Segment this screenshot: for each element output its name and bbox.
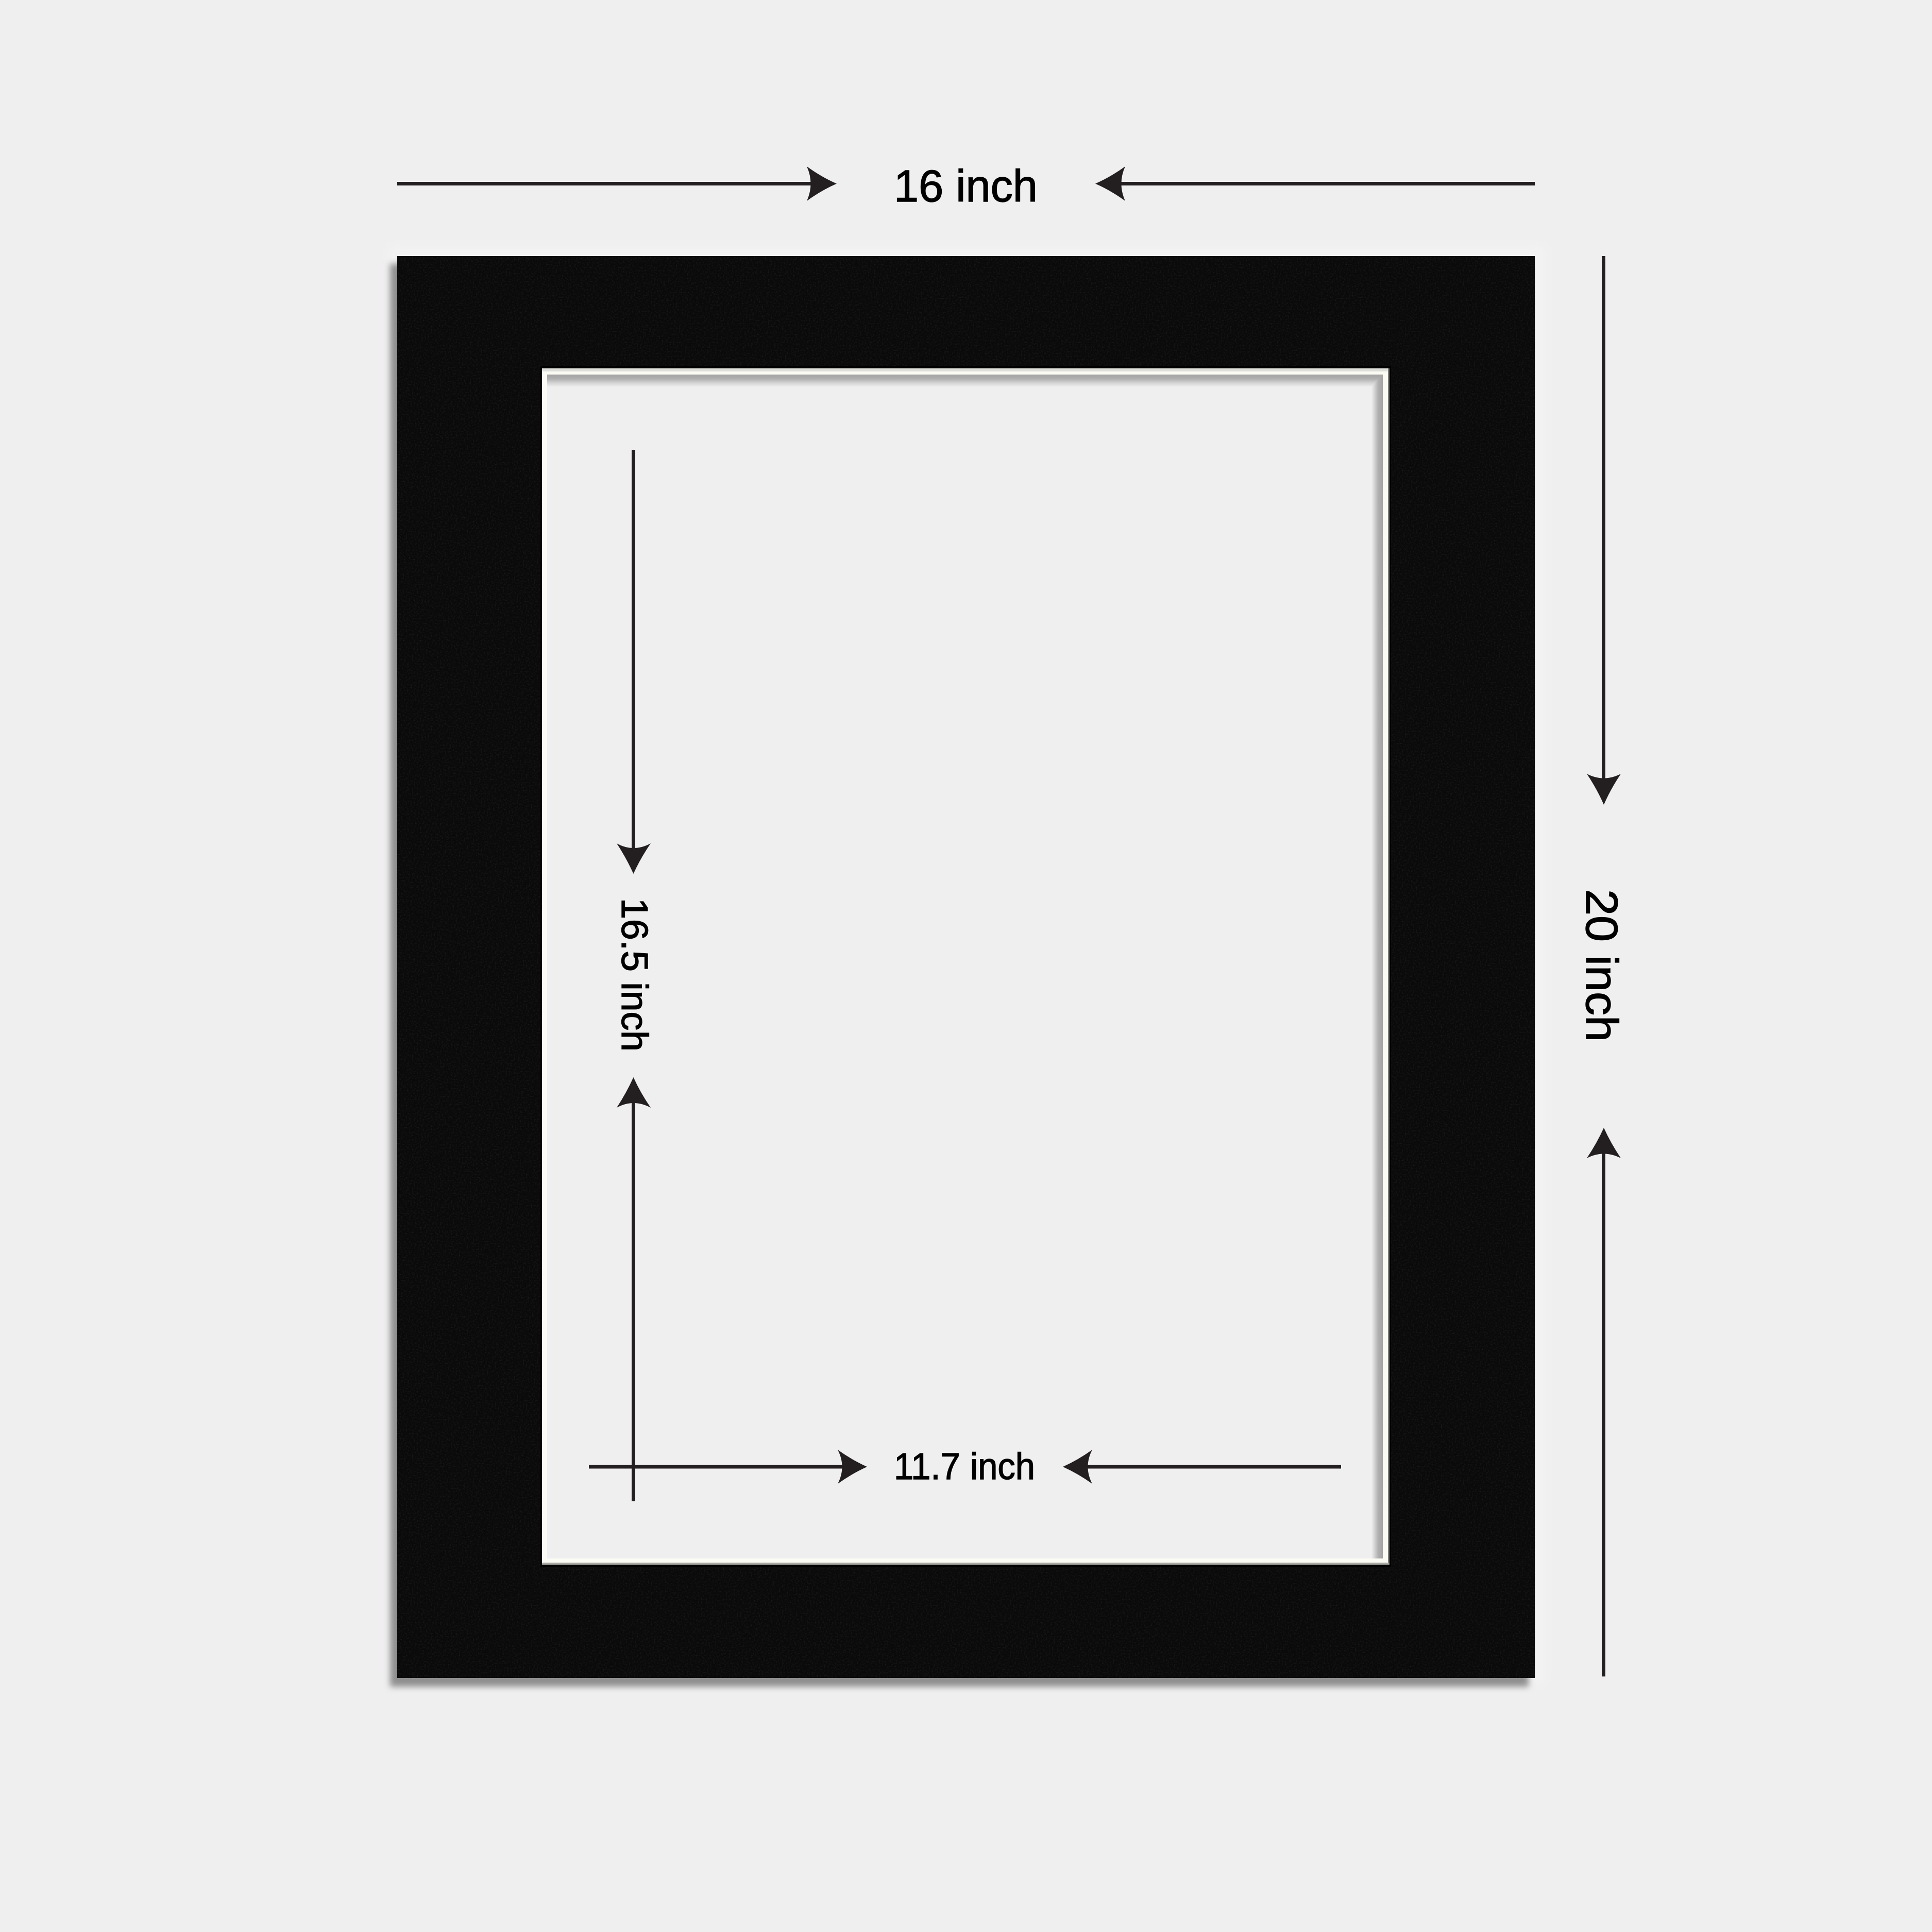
label: 11.7 inch: 11.7 inch <box>894 1446 1035 1487</box>
mat drop shadow <box>390 264 1529 1687</box>
inner shadow top <box>547 375 1383 387</box>
opening interior <box>547 375 1383 1558</box>
arrow: opening width, right <box>1063 1450 1341 1484</box>
arrow: top width, left <box>397 166 837 201</box>
bevel right edge <box>1388 368 1389 1565</box>
arrow: top width, right <box>1095 166 1535 201</box>
panel: black photo mat with opening <box>389 246 1546 1687</box>
opening bevel edge <box>542 368 1389 1565</box>
arrow: outer height, bottom <box>1587 1128 1621 1676</box>
opening dark outline <box>540 366 1391 1567</box>
arrow: opening width, left <box>589 1450 867 1484</box>
mat paper grain <box>397 256 1535 1678</box>
label: 20 inch: 20 inch <box>1577 889 1626 1042</box>
arrow: opening height, top <box>617 450 651 874</box>
bevel bottom edge <box>542 1563 1389 1565</box>
arrow: outer height, top <box>1587 256 1621 805</box>
label: 16 inch: 16 inch <box>894 161 1038 211</box>
inner shadow right <box>1371 375 1383 1558</box>
label: 16.5 inch: 16.5 inch <box>614 898 655 1052</box>
bevel top tint <box>542 368 1388 371</box>
mat board <box>397 256 1535 1678</box>
mat light halo <box>389 246 1546 1684</box>
arrow: opening height, bottom <box>617 1077 651 1501</box>
